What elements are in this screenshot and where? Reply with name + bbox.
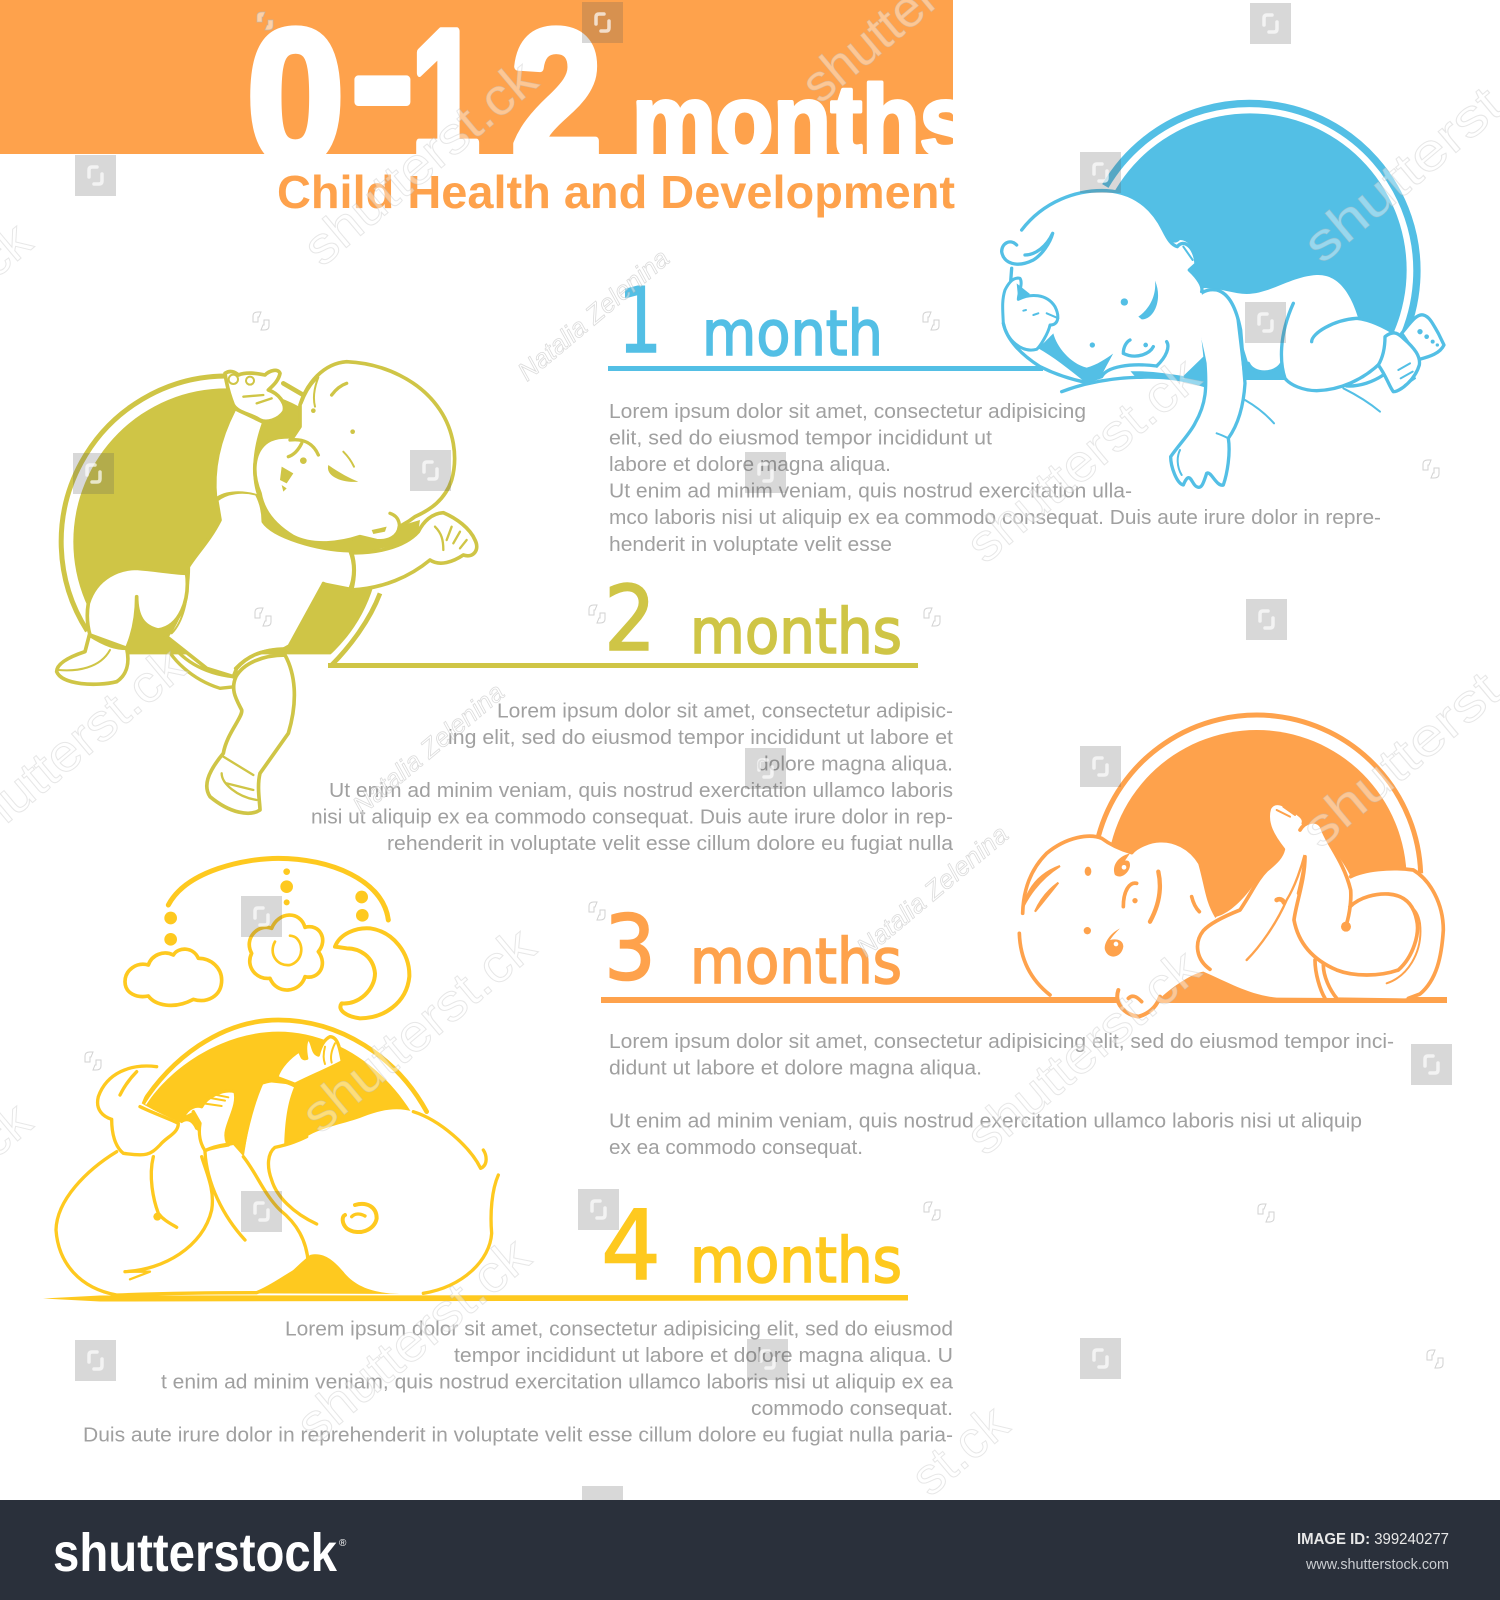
watermark layer: shutterst.ck bbox=[285, 1226, 542, 1454]
text block: 3 months bbox=[609, 1030, 1394, 1159]
hand under cheek bbox=[1003, 278, 1058, 350]
hand on leg bbox=[1378, 333, 1420, 392]
text block: 2 months bbox=[311, 700, 954, 855]
wedge under head bbox=[262, 510, 420, 552]
ear bbox=[343, 1204, 377, 1232]
head bbox=[1019, 836, 1217, 1017]
text block: 2 months: Lorem ipsum dolor sit amet, consectetur adipisic- bbox=[497, 700, 953, 722]
text block: 1 month: mco laboris nisi ut aliquip ex ea commodo consequat. Duis aute irure dolor in repre- bbox=[609, 506, 1381, 529]
watermark layer: shutterst.ck bbox=[290, 916, 547, 1144]
text block: 1 month bbox=[609, 400, 1381, 556]
watermark layer: Natalia Zelenina bbox=[347, 677, 510, 821]
text block: 1 month: Ut enim ad minim veniam, quis nostrud exercitation ulla- bbox=[609, 480, 1132, 503]
head bbox=[1012, 191, 1203, 376]
heading: 4 months bbox=[601, 1190, 902, 1302]
lower leg bbox=[207, 655, 294, 813]
heading: 2 months: months bbox=[690, 595, 902, 668]
heading: 4 months: 4 bbox=[601, 1190, 661, 1302]
text block: 3 months: ex ea commodo consequat. bbox=[609, 1136, 863, 1159]
footer logo: shutterstock bbox=[53, 1523, 338, 1583]
diaper band bbox=[162, 637, 235, 688]
torso and arm bbox=[1197, 803, 1338, 998]
watermark layer: Natalia Zelenina bbox=[851, 819, 1014, 963]
flower bbox=[249, 915, 323, 990]
icon: stretching baby, olive bbox=[57, 362, 477, 813]
watermark layer: shutterst bbox=[1292, 75, 1500, 274]
text block: 4 months: Duis aute irure dolor in reprehenderit in voluptate velit esse cillum dolore eu fugiat nulla paria- bbox=[83, 1424, 953, 1447]
moon bbox=[335, 928, 409, 1018]
text block: 2 months: rehenderit in voluptate velit esse cillum dolore eu fugiat nulla bbox=[387, 832, 954, 855]
ring and disk bbox=[145, 1032, 415, 1160]
cloud bbox=[125, 949, 222, 1005]
heading: 4 months: months bbox=[690, 1224, 902, 1297]
text block: 1 month: elit, sed do eiusmod tempor incididunt ut bbox=[609, 427, 992, 450]
icon: sleeping baby, blue bbox=[1002, 103, 1444, 487]
hair curl bbox=[1002, 233, 1053, 264]
text block: 1 month: henderit in voluptate velit esse bbox=[609, 533, 892, 556]
rule: 4 months bbox=[43, 1295, 908, 1302]
text block: 2 months: ing elit, sed do eiusmod tempor incididunt ut labore et bbox=[448, 726, 953, 749]
text block: 2 months: Ut enim ad minim veniam, quis nostrud exercitation ullamco laboris bbox=[329, 779, 953, 802]
heading: 3 months: 3 bbox=[604, 896, 656, 1001]
watermark layer: shutterst bbox=[1290, 660, 1500, 859]
watermark layer: shutterst.ck bbox=[955, 938, 1212, 1166]
text block: 3 months: Lorem ipsum dolor sit amet, consectetur adipisicing elit, sed do eiusmod tempor inci- bbox=[609, 1030, 1394, 1053]
subtitle: Child Health and Development bbox=[277, 166, 955, 218]
torso bbox=[167, 492, 354, 677]
watermark layer: shutterst.ck bbox=[292, 49, 549, 277]
second foot and leg bbox=[1294, 822, 1443, 998]
torso and leg bbox=[1202, 275, 1398, 391]
heading: 2 months: 2 bbox=[604, 567, 656, 672]
raised arm bbox=[216, 411, 262, 497]
watermark layer: shutterst.ck bbox=[955, 346, 1212, 574]
text block: 3 months: Ut enim ad minim veniam, quis nostrud exercitation ullamco laboris nisi ut aliquip bbox=[609, 1110, 1362, 1132]
text block: 4 months: Lorem ipsum dolor sit amet, consectetur adipisicing elit, sed do eiusmod bbox=[285, 1318, 953, 1341]
foot bbox=[57, 635, 128, 684]
raised arm and hand bbox=[242, 1082, 295, 1173]
icon: baby mobile toy bbox=[56, 858, 498, 1295]
title banner bbox=[0, 0, 953, 154]
footer url: www.shutterstock.com bbox=[1305, 1556, 1449, 1573]
text block: 2 months: nisi ut aliquip ex ea commodo consequat. Duis aute irure dolor in rep- bbox=[311, 806, 953, 828]
text block: 3 months: didunt ut labore et dolore magna aliqua. bbox=[609, 1056, 982, 1080]
icon: baby holding feet, orange bbox=[1019, 715, 1443, 1030]
heading: 1 month bbox=[608, 269, 1043, 374]
hanging arm bbox=[1171, 290, 1245, 487]
text block: 4 months bbox=[83, 1318, 954, 1447]
heading: 3 months bbox=[604, 896, 902, 1001]
footer registered mark: ® bbox=[339, 1538, 347, 1549]
rule: 3 months bbox=[601, 997, 1447, 1003]
head right outline and torso bbox=[269, 1109, 498, 1293]
watermark layer: Natalia Zelenina bbox=[512, 243, 675, 387]
heading: 1 month: 1 bbox=[618, 269, 662, 374]
text block: 1 month: labore et dolore magna aliqua. bbox=[609, 453, 891, 476]
heading: 3 months: months bbox=[690, 925, 902, 998]
right arm bbox=[352, 513, 477, 590]
text block: 4 months: t enim ad minim veniam, quis nostrud exercitation ullamco laboris nisi ut aliquip ex ea bbox=[161, 1371, 954, 1394]
text block: 2 months: dolore magna aliqua. bbox=[757, 752, 953, 776]
footer bar bbox=[0, 1500, 1500, 1600]
yellow mound bbox=[257, 1254, 400, 1294]
title banner: months bbox=[632, 65, 972, 177]
heading: 2 months bbox=[328, 567, 918, 672]
text block: 1 month: Lorem ipsum dolor sit amet, consectetur adipisicing bbox=[609, 400, 1086, 423]
watermark layer: st.ck bbox=[900, 1393, 1020, 1507]
leg with foot raised bbox=[57, 1066, 308, 1295]
raised thigh bbox=[87, 568, 187, 648]
foot bbox=[1402, 315, 1444, 359]
text block: 4 months: tempor incididunt ut labore et dolore magna aliqua. U bbox=[454, 1344, 953, 1367]
head bbox=[255, 362, 455, 543]
text block: 4 months: commodo consequat. bbox=[751, 1397, 953, 1420]
footer image id: IMAGE ID: 399240277 bbox=[1297, 1531, 1449, 1548]
heading: 1 month: month bbox=[702, 297, 883, 370]
